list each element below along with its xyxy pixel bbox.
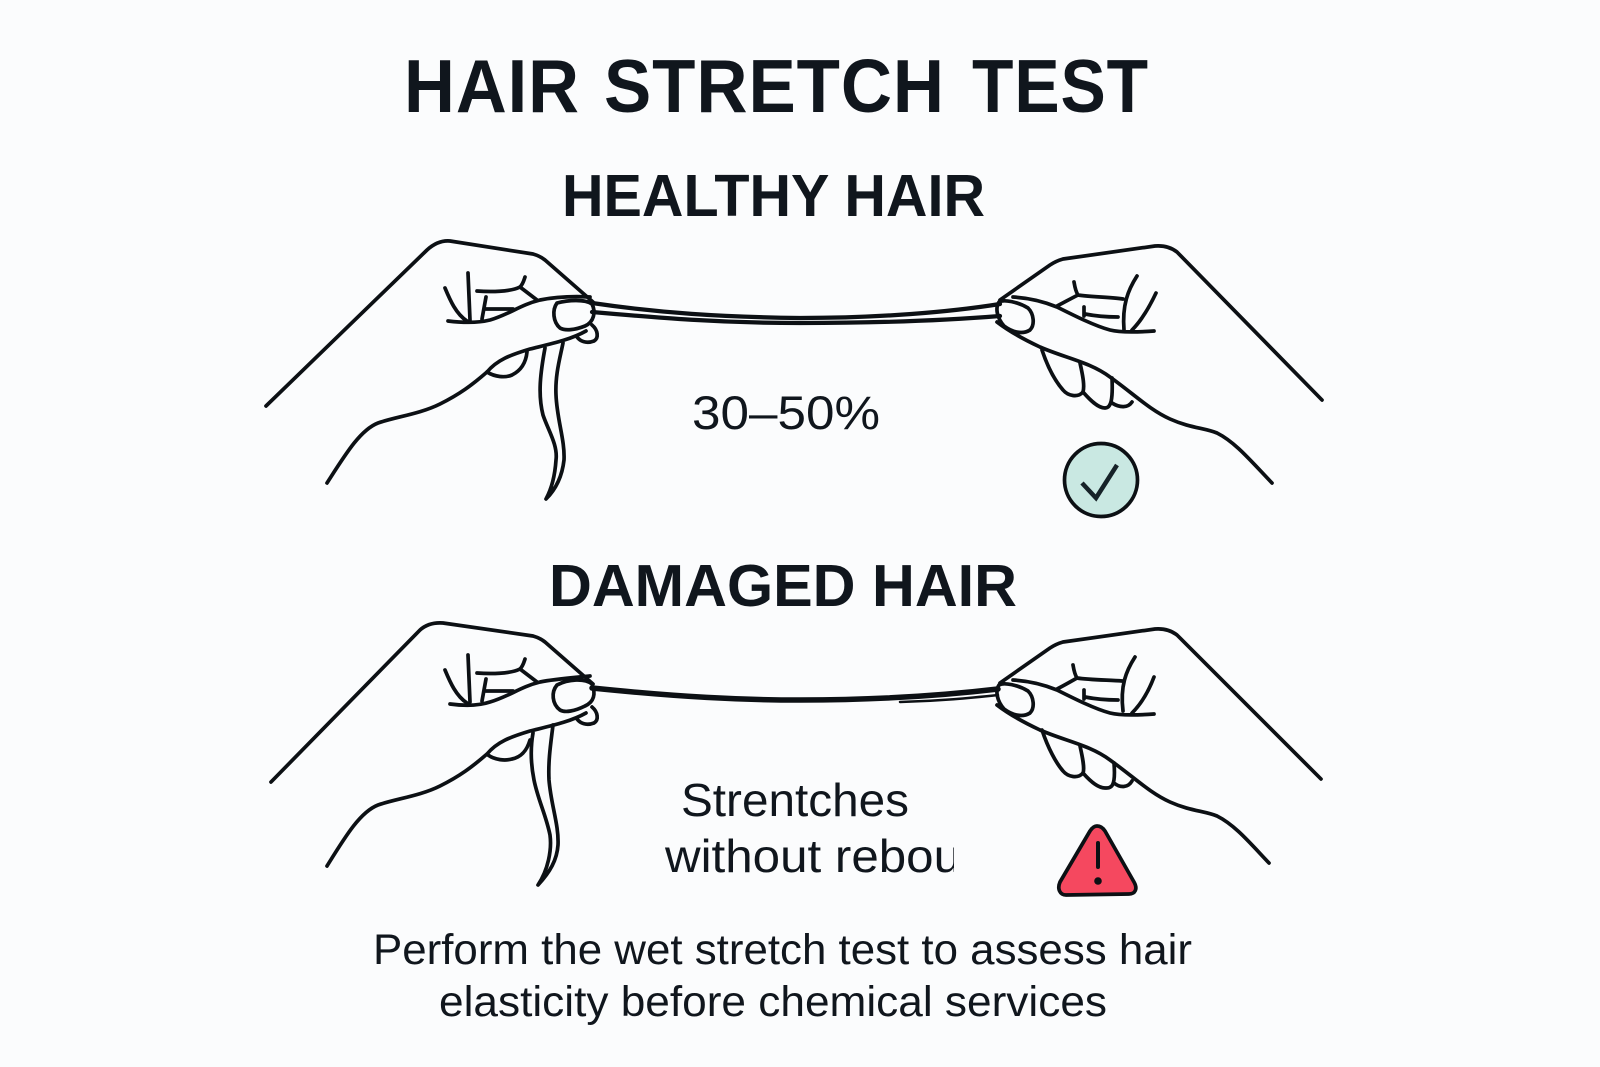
heading: damaged hair: DAMAGED HAIR (549, 553, 1017, 619)
icon: red warning triangle (1059, 826, 1136, 895)
footer text (373, 926, 1192, 1026)
stretch value: 30–50% (692, 386, 880, 439)
title: STRETCH (604, 44, 945, 128)
footer text: Perform the wet stretch test to assess hair (373, 926, 1192, 974)
icon: green check badge (1064, 444, 1138, 516)
footer text: elasticity before chemical services (439, 978, 1107, 1026)
hair tail, left (531, 725, 558, 885)
hair strand, stretched (592, 303, 1000, 323)
hair tail, left (540, 343, 564, 499)
icon: left hand holding hair (271, 623, 597, 866)
icon: left hand holding hair (266, 241, 597, 483)
label: stretch result line one: Strentches (681, 774, 909, 826)
icon: right hand holding hair (997, 246, 1322, 483)
heading: healthy hair: HEALTHY HAIR (562, 163, 985, 229)
label: stretch result line two, clipped: without rebou (664, 830, 961, 882)
icon: right hand holding hair (997, 629, 1321, 863)
title: HAIR (404, 44, 580, 128)
title: TEST (972, 44, 1149, 128)
hair strand, stretched (592, 688, 998, 702)
panel: healthy hair illustration (266, 241, 1322, 516)
panel: damaged hair illustration (271, 623, 1321, 895)
